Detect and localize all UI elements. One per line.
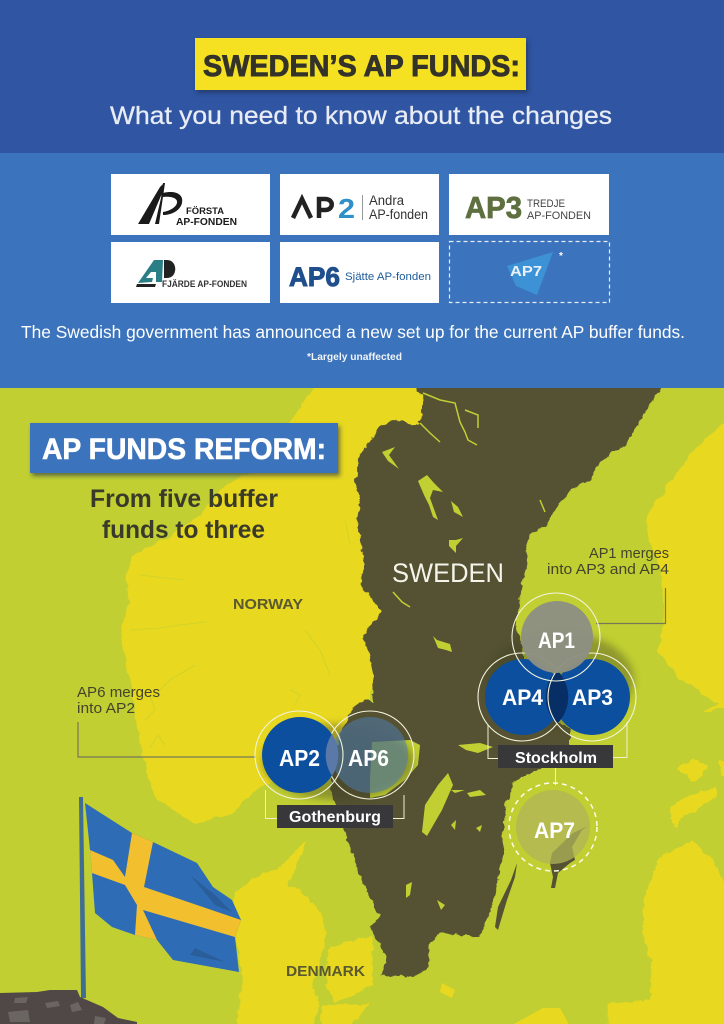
- region: Denmark south islands: [320, 1004, 370, 1024]
- region: Denmark Jutland: [233, 840, 326, 1024]
- circle: AP2: AP2: [279, 745, 320, 771]
- logo: AP2: [280, 174, 439, 235]
- callout: AP6 merges: [77, 685, 256, 757]
- callout: AP6 merges: into AP2: [77, 701, 135, 717]
- circle: AP1: [512, 593, 600, 681]
- Stockholm group: [478, 593, 636, 785]
- callout: AP1 merges: [547, 546, 669, 624]
- flagpole: [79, 797, 86, 998]
- circle: AP6: AP6: [348, 745, 389, 771]
- logo: AP3: [449, 174, 609, 235]
- region: Denmark Zealand: [326, 936, 373, 1002]
- Gothenburg group: [255, 711, 414, 828]
- island: Gotland: [550, 826, 588, 888]
- region: Finland: [647, 420, 724, 706]
- label: Gothenburg: Gothenburg: [289, 809, 381, 826]
- label: Gothenburg: [277, 805, 393, 828]
- Sweden landmass: [330, 380, 665, 977]
- callout: AP1 merges: AP1 merges: [589, 546, 669, 562]
- region: Norway: [120, 380, 425, 823]
- logo: AP6: Sjätte AP-fonden: [345, 271, 431, 283]
- circle: AP6: [326, 711, 414, 799]
- logo: AP2: Andra: [369, 193, 404, 208]
- logo: AP1: AP-FONDEN: [176, 217, 237, 228]
- circle: AP3: AP3: [572, 685, 613, 710]
- logo: AP3: AP-FONDEN: [527, 210, 591, 222]
- circle: AP4: [478, 653, 566, 741]
- title: [195, 38, 526, 90]
- northern rivers: [393, 393, 545, 607]
- logo: AP1: [111, 174, 270, 235]
- rock: [0, 990, 137, 1024]
- circle: AP4: AP4: [502, 685, 544, 710]
- logo: AP3: TREDJE: [527, 198, 565, 210]
- label: Norway: NORWAY: [233, 596, 303, 613]
- logo: AP7: *: [559, 251, 563, 262]
- lakes: [370, 447, 493, 910]
- logo: AP4: FJÄRDE AP-FONDEN: [162, 279, 247, 289]
- callout: AP6 merges: AP6 merges: [77, 685, 160, 701]
- label: Sweden: SWEDEN: [392, 558, 504, 588]
- label: Stockholm: [498, 745, 613, 768]
- Norway fjords: [130, 520, 350, 748]
- logo: AP1: FÖRSTA: [186, 206, 224, 217]
- reform subheading: funds to three: [102, 516, 265, 544]
- circle: AP3: [546, 653, 636, 741]
- logo: AP4: [111, 242, 270, 303]
- logo: AP2: AP-fonden: [369, 207, 428, 222]
- header band: [0, 0, 724, 153]
- announcement text: The Swedish government has announced a new set up for the current AP buffer funds.: [21, 322, 685, 342]
- flag cross: [90, 833, 241, 940]
- island: [440, 983, 455, 998]
- reform heading: AP FUNDS REFORM:: [42, 433, 326, 466]
- circle: AP7: [509, 783, 597, 871]
- label: Denmark: DENMARK: [286, 963, 365, 980]
- callout: AP1 merges: into AP3 and AP4: [547, 562, 669, 578]
- footnote: *Largely unaffected: [307, 352, 402, 363]
- logo: AP2: 2: [338, 193, 355, 224]
- logo: AP7: AP7: [510, 264, 542, 280]
- circle: AP1: AP1: [538, 628, 575, 653]
- circle shadows: [262, 724, 414, 800]
- subheader band: [0, 153, 724, 388]
- islands: Estonia: [670, 700, 724, 828]
- map background: [121, 388, 724, 1024]
- reform subheading: From five buffer: [90, 485, 278, 513]
- logo: AP3: AP3: [465, 190, 522, 225]
- logo: AP6: [280, 242, 439, 303]
- circle: AP2: [255, 711, 343, 799]
- reform heading: [30, 423, 338, 473]
- title: SWEDEN’S AP FUNDS:: [203, 50, 520, 83]
- region: Poland coast: [607, 840, 724, 1024]
- circle shadows: [486, 632, 634, 728]
- logo: AP7: [450, 242, 610, 302]
- flag of Sweden: [79, 797, 241, 998]
- island: Oland: [495, 863, 517, 930]
- flag field: [85, 803, 241, 972]
- logo: AP6: AP6: [289, 262, 340, 292]
- subtitle: What you need to know about the changes: [110, 102, 612, 130]
- label: Stockholm: Stockholm: [515, 750, 597, 767]
- flag folds: [190, 875, 232, 962]
- region: Germany coast: [514, 1008, 568, 1024]
- circle: AP7: AP7: [534, 818, 575, 843]
- reform subheading: [90, 485, 278, 544]
